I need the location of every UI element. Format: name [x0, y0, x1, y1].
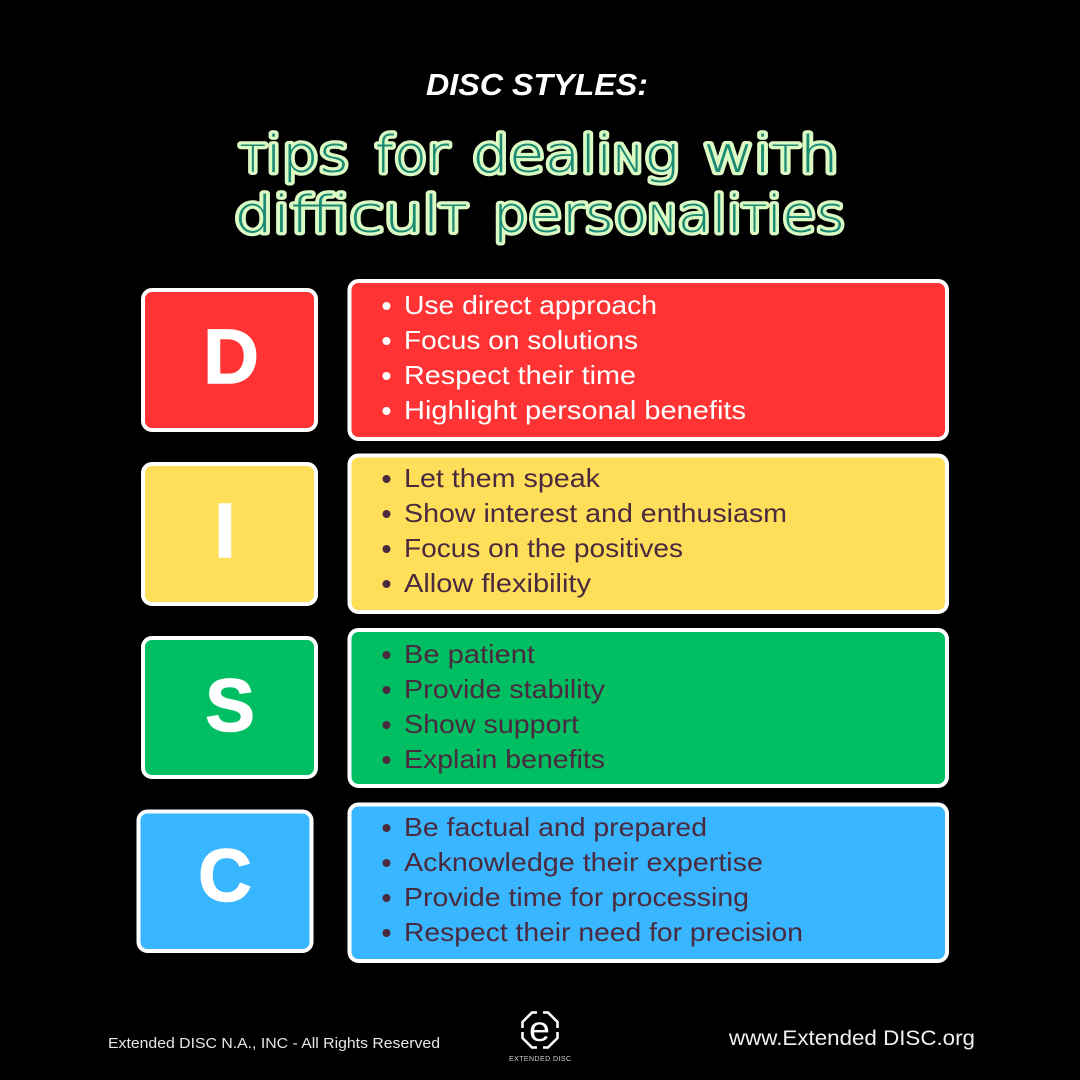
title: tips for dealing with difficult personalities: deali Ng [472, 126, 679, 185]
panel: I tips [350, 456, 947, 612]
footer: website: www.Extended DISC.org [728, 1027, 975, 1050]
panel: D tips: Focus on solutions [404, 325, 638, 355]
title: tips for dealing with difficult personalities: wi Th [703, 126, 839, 185]
panel: I letter box: I [214, 488, 236, 574]
title: tips for dealing with difficult personalities: Tips [240, 126, 349, 185]
title: tips for dealing with difficult personalities: perso NaliTies [493, 186, 845, 245]
panel: S tips [350, 630, 947, 786]
panel: C tips: Respect their need for precision [404, 917, 803, 947]
panel: I tips: Allow flexibility [404, 568, 591, 598]
panel: C tips: Acknowledge their expertise [404, 847, 763, 877]
title: tips for dealing with difficult personalities: for [375, 126, 449, 185]
panel: D letter box: D [203, 314, 259, 400]
panel: S tips: Explain benefits [404, 744, 605, 774]
panel: D letter box [143, 290, 316, 430]
panel: I tips: Show interest and enthusiasm [404, 498, 787, 528]
panel: S letter box [143, 638, 316, 777]
footer: copyright: Extended DISC N.A., INC - All Rights Reserved [108, 1035, 440, 1052]
panel: D tips: Use direct approach [404, 290, 657, 320]
icon: Extended DISC logo: e [529, 1010, 550, 1049]
panel: S tips: Provide stability [404, 674, 605, 704]
panel: D tips: Highlight personal benefits [404, 395, 746, 425]
panel: C letter box: C [198, 834, 252, 917]
panel: I letter box [143, 464, 316, 604]
panel: S tips: Show support [404, 709, 580, 739]
panel: D tips: Respect their time [404, 360, 636, 390]
icon: Extended DISC logo: EXTENDED DISC [509, 1056, 571, 1063]
icon: Extended DISC logo [509, 1010, 571, 1063]
title: tips for dealing with difficult personalities [234, 126, 845, 245]
panel: D tips [350, 281, 947, 439]
panel: S tips: Be patient [404, 639, 536, 669]
title: tips for dealing with difficult personalities: difficul T [234, 186, 467, 245]
panel: I tips: Let them speak [404, 463, 601, 493]
panel: C tips: Provide time for processing [404, 882, 749, 912]
panel: I tips: Focus on the positives [404, 533, 683, 563]
heading: DISC styles: DISC STYLES: [426, 67, 648, 102]
panel: C tips [350, 804, 947, 961]
panel: C letter box [138, 812, 312, 951]
panel: S letter box: S [205, 664, 255, 747]
panel: C tips: Be factual and prepared [404, 812, 707, 842]
